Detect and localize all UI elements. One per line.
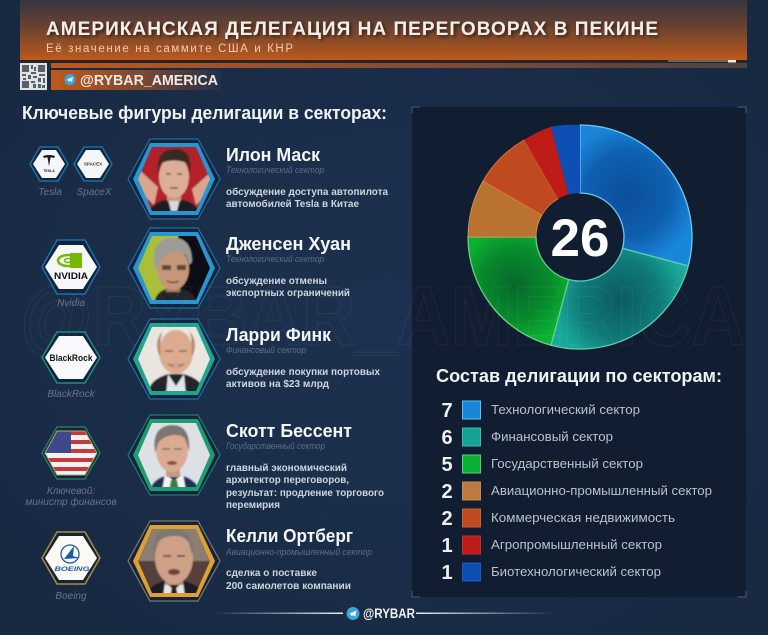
header banner bbox=[20, 0, 747, 68]
logo: Boeing: Boeing bbox=[55, 591, 87, 602]
description: обсуждение доступа автопилота bbox=[226, 186, 388, 198]
sector: Технологический сектор bbox=[226, 254, 324, 265]
footer handle: @RYBAR bbox=[363, 606, 415, 621]
person: Larry Fink bbox=[128, 319, 380, 399]
footer brand bbox=[212, 606, 556, 621]
logo: US flag bbox=[25, 427, 117, 508]
logo: Boeing: BOEING bbox=[54, 566, 90, 573]
description: архитектор переговоров, bbox=[226, 474, 349, 486]
legend: 7 bbox=[441, 400, 453, 422]
name: Илон Маск bbox=[226, 145, 321, 165]
logo: Tesla bbox=[30, 147, 68, 198]
label bbox=[25, 486, 117, 508]
description: результат: продление торгового bbox=[226, 487, 384, 499]
logo: SpaceX bbox=[74, 147, 112, 198]
portrait bbox=[128, 228, 220, 308]
name: Дженсен Хуан bbox=[226, 234, 351, 254]
channel bar bbox=[51, 70, 221, 90]
description: главный экономический bbox=[226, 462, 347, 474]
label: министр финансов bbox=[25, 496, 117, 508]
description: экспортных ограничений bbox=[226, 287, 350, 299]
channel handle: @RYBAR_AMERICA bbox=[80, 72, 218, 89]
description: сделка о поставке bbox=[226, 567, 317, 579]
description: обсуждение покупки портовых bbox=[226, 366, 380, 378]
person: Scott Bessent bbox=[128, 415, 384, 511]
panel: delegation composition bbox=[412, 107, 746, 597]
portrait bbox=[128, 139, 220, 219]
description bbox=[226, 366, 380, 390]
legend: Авиационно-промышленный сектор bbox=[491, 483, 712, 498]
name: Келли Ортберг bbox=[226, 526, 353, 546]
legend: 1 bbox=[441, 562, 453, 584]
description: перемирия bbox=[226, 499, 280, 511]
logo: BlackRock: BlackRock bbox=[47, 389, 96, 400]
legend: Государственный сектор bbox=[491, 456, 643, 471]
description: автомобилей Tesla в Китае bbox=[226, 198, 359, 210]
description: обсуждение отмены bbox=[226, 275, 327, 287]
logo: Nvidia bbox=[42, 240, 100, 309]
legend: Агропромышленный сектор bbox=[491, 537, 662, 552]
QR code bbox=[20, 63, 47, 90]
portrait bbox=[128, 521, 220, 601]
description bbox=[226, 186, 388, 210]
sector: Государственный сектор bbox=[226, 441, 325, 452]
sector: Финансовый сектор bbox=[226, 345, 306, 356]
portrait bbox=[128, 319, 220, 399]
logo: Tesla: Tesla bbox=[38, 187, 62, 198]
legend: 1 bbox=[441, 535, 453, 557]
logo: SpaceX: SPACEX bbox=[84, 162, 102, 166]
portrait bbox=[128, 415, 220, 495]
legend: 6 bbox=[441, 427, 453, 449]
logo: Tesla: TESLA bbox=[43, 169, 55, 173]
description bbox=[226, 567, 351, 592]
donut chart bbox=[468, 125, 692, 349]
logo: BlackRock: BlackRock bbox=[50, 353, 93, 364]
section heading: Ключевые фигуры делигации в секторах: bbox=[22, 103, 387, 123]
person: Jensen Huang bbox=[128, 228, 351, 308]
description bbox=[226, 275, 350, 299]
logo: Boeing bbox=[42, 532, 100, 602]
icon: telegram bbox=[346, 607, 360, 620]
legend: 2 bbox=[441, 481, 453, 503]
legend: Коммерческая недвижимость bbox=[491, 510, 675, 525]
legend: Биотехнологический сектор bbox=[491, 564, 661, 579]
logo: Nvidia: NVIDIA bbox=[54, 271, 88, 282]
logo: BlackRock bbox=[42, 332, 100, 400]
legend: Технологический сектор bbox=[491, 402, 640, 417]
logo: SpaceX: SpaceX bbox=[76, 187, 112, 198]
legend: Финансовый сектор bbox=[491, 429, 613, 444]
subtitle: Её значение на саммите США и КНР bbox=[46, 43, 293, 55]
title: АМЕРИКАНСКАЯ ДЕЛЕГАЦИЯ НА ПЕРЕГОВОРАХ В ПЕКИНЕ bbox=[46, 19, 658, 40]
total: 26 bbox=[551, 209, 609, 268]
legend heading: Состав делигации по секторам: bbox=[436, 366, 722, 386]
legend: 5 bbox=[441, 454, 453, 476]
name: Скотт Бессент bbox=[226, 421, 352, 441]
person: Elon Musk bbox=[128, 139, 388, 219]
description: 200 самолетов компании bbox=[226, 580, 351, 592]
sector: Технологический сектор bbox=[226, 165, 324, 176]
label: Ключевой: bbox=[47, 486, 95, 497]
description bbox=[226, 462, 384, 511]
sector: Авиационно-промышленный сектор bbox=[225, 547, 372, 558]
person: Kelly Ortberg bbox=[128, 521, 372, 601]
logo: Nvidia: Nvidia bbox=[57, 298, 85, 309]
legend bbox=[441, 400, 712, 584]
description: активов на $23 млрд bbox=[226, 378, 329, 390]
name: Ларри Финк bbox=[226, 325, 332, 345]
icon: telegram bbox=[64, 74, 76, 85]
legend: 2 bbox=[441, 508, 453, 530]
